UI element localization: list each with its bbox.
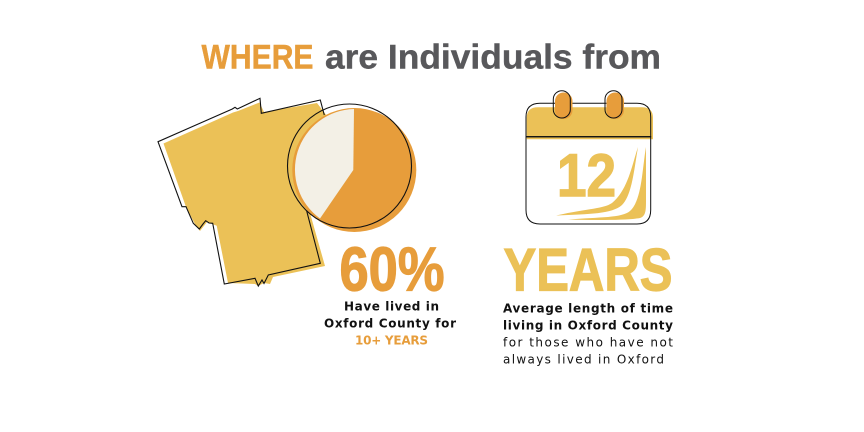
caption: 10+ years: 10+ YEARS (355, 333, 428, 347)
calendar rings (553, 91, 624, 119)
caption: average length: for those who have not (503, 336, 673, 350)
caption: average length: living in Oxford County (503, 318, 673, 332)
caption: average length: always lived in Oxford (503, 352, 664, 366)
map: Oxford County (158, 98, 327, 286)
title: WHERE (202, 38, 314, 76)
caption: average length (503, 302, 673, 366)
60% stat: 60% (340, 236, 444, 304)
calendar page curl (556, 147, 646, 220)
pie chart: 60% (288, 104, 416, 232)
icon: calendar (526, 91, 653, 224)
caption: 10+ years: Have lived in (344, 300, 439, 314)
title: are Individuals from (325, 38, 661, 76)
calendar number: 12 (557, 142, 616, 209)
caption: 10+ years: Oxford County for (324, 316, 456, 330)
caption: average length: Average length of time (503, 302, 673, 316)
years stat: YEARS (504, 236, 672, 304)
caption: 10+ years (324, 300, 456, 347)
